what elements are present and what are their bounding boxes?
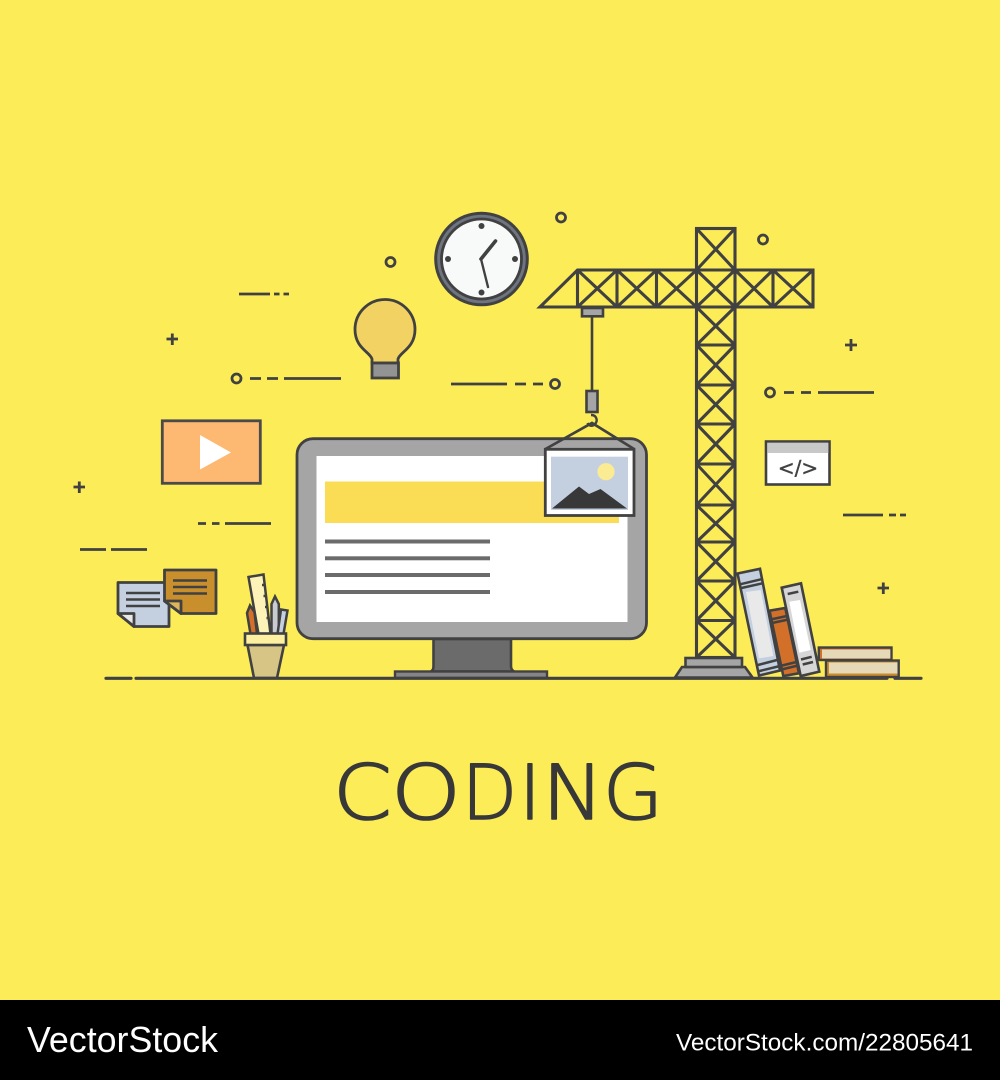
- text lines: [325, 540, 490, 594]
- cup rim: [245, 634, 286, 645]
- code window icon: [766, 442, 830, 484]
- code window icon: </>: [778, 456, 818, 480]
- title: O: [391, 748, 461, 837]
- ground line: [106, 677, 921, 680]
- crane base: [675, 658, 752, 678]
- title: G: [603, 748, 663, 837]
- blue note: [118, 582, 169, 626]
- sling: [546, 423, 634, 449]
- books: [738, 569, 899, 677]
- monitor: [297, 439, 646, 678]
- hanging picture: [545, 423, 634, 516]
- title: D: [462, 748, 517, 837]
- sun: [597, 463, 615, 480]
- footer logo: VectorStock: [27, 1019, 219, 1060]
- cup body: [248, 645, 284, 678]
- blue pencil: [278, 610, 288, 634]
- pencil cup: [245, 574, 288, 678]
- hook block: [586, 391, 598, 412]
- plus marks: [74, 334, 889, 594]
- title: I: [519, 748, 541, 837]
- blue book: [738, 569, 780, 676]
- footer id: VectorStock.com/22805641: [676, 1030, 973, 1056]
- orange pencil: [247, 606, 257, 634]
- orange note: [164, 570, 216, 614]
- orange book: [770, 608, 799, 676]
- grey book: [782, 583, 819, 676]
- screen: [316, 456, 628, 622]
- crane mast: [696, 228, 735, 658]
- grey pencil: [272, 596, 279, 634]
- icon: light bulb: [355, 300, 415, 378]
- flat top book: [819, 648, 892, 660]
- yellow banner: [325, 482, 619, 523]
- speech notes: [118, 570, 216, 626]
- clock icon: [436, 213, 527, 305]
- ruler: [248, 574, 270, 634]
- picture frame: [545, 449, 634, 516]
- footer bar: [0, 1000, 1000, 1080]
- picture background: [551, 457, 628, 510]
- video player icon: [162, 421, 260, 483]
- monitor frame: [297, 439, 646, 639]
- monitor base: [395, 672, 547, 678]
- title: C: [333, 748, 392, 837]
- title: N: [542, 748, 604, 837]
- hook: [588, 415, 597, 426]
- mountains: [552, 486, 627, 508]
- dashed accent lines: [80, 294, 906, 550]
- cable: [591, 316, 593, 391]
- monitor stand: [431, 639, 514, 672]
- flat bottom book: [826, 660, 899, 677]
- trolley: [582, 308, 603, 316]
- crane jib: [540, 270, 813, 307]
- crane: [540, 228, 813, 678]
- decorative small circles: [386, 213, 768, 266]
